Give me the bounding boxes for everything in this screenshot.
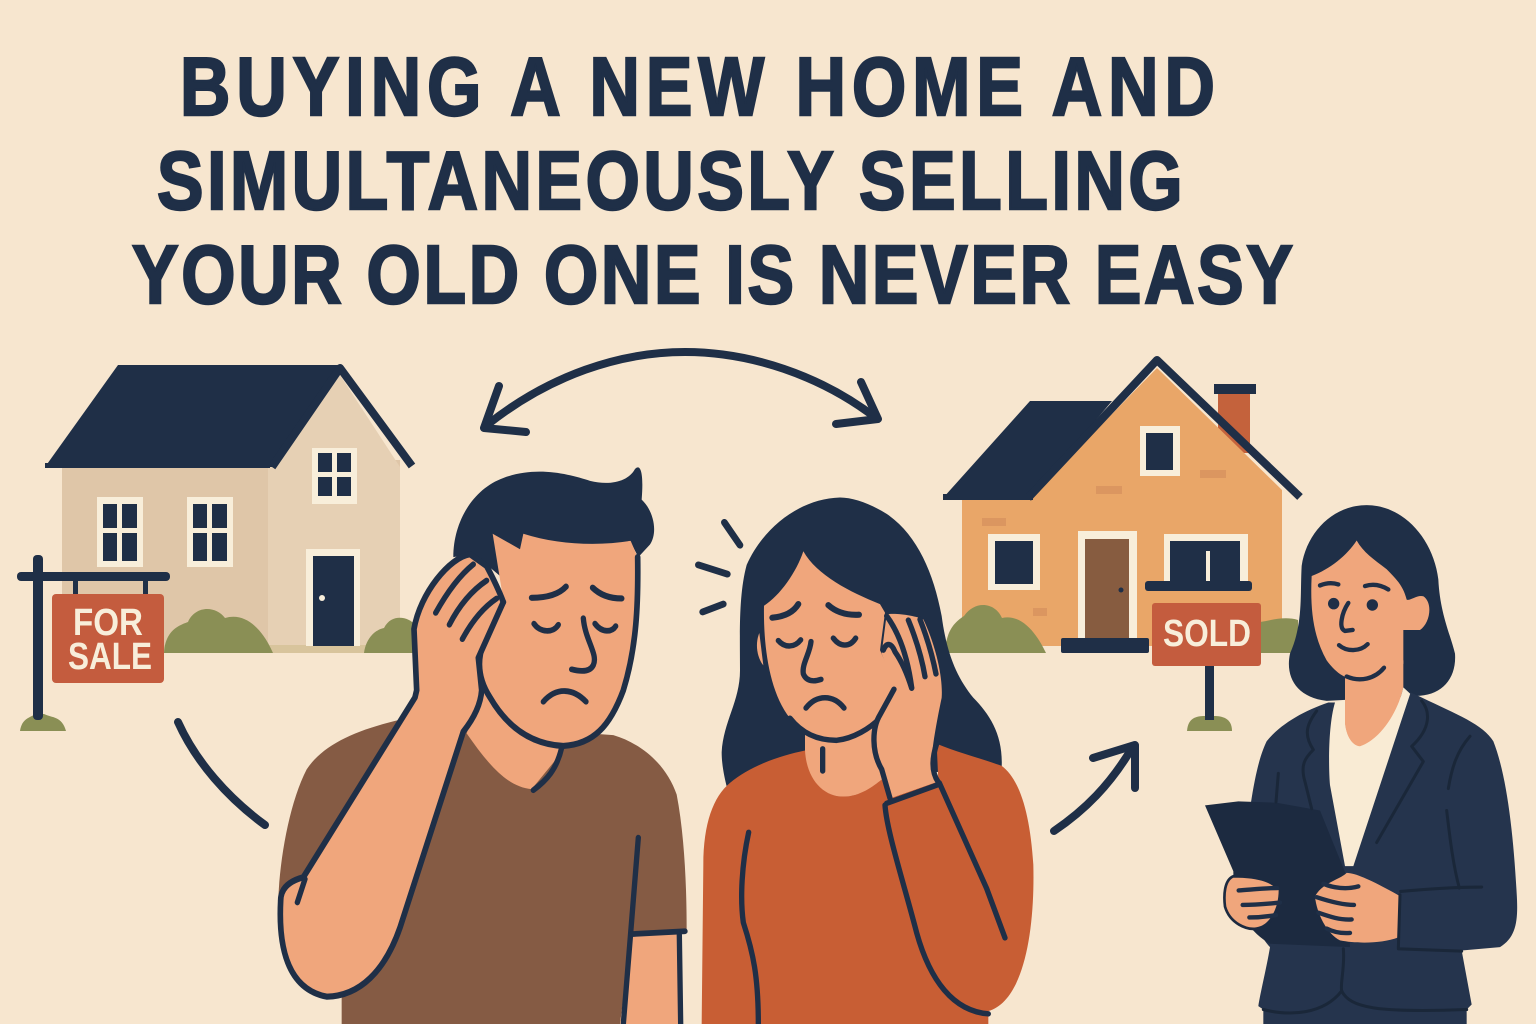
woman face [764, 551, 897, 740]
agent blazer [1241, 692, 1517, 1024]
agent lines [1239, 583, 1388, 933]
agent neck [1345, 660, 1403, 746]
icon: sold sign [1152, 603, 1261, 731]
icon: for sale sign: FOR [73, 602, 143, 644]
agent blouse [1329, 687, 1411, 866]
man raised arm and hand [280, 554, 503, 997]
man neck [467, 683, 565, 789]
woman neck [805, 722, 887, 797]
icon: for sale sign [17, 555, 170, 731]
man shirt [278, 720, 687, 1024]
agent hair [1289, 505, 1455, 701]
woman lines [698, 522, 1005, 1024]
arrow: right diagonal [1054, 745, 1135, 831]
woman hand [875, 614, 942, 798]
figure: real estate agent [1205, 505, 1517, 1024]
title: SIMULTANEOUSLY SELLING [157, 135, 1183, 227]
arrow: top double-headed curve [484, 352, 878, 432]
man finger lines [297, 564, 685, 1024]
man right arm [620, 933, 682, 1024]
man brows, eyes, nose, mouth [532, 587, 566, 598]
icon: orange sold house [943, 360, 1300, 653]
icon: beige house for sale [45, 365, 414, 653]
stress marks [724, 522, 740, 545]
woman hair [722, 497, 1002, 786]
agent clipboard [1205, 801, 1350, 947]
agent blazer seams [1263, 701, 1482, 1013]
figure: stressed woman [698, 497, 1033, 1024]
woman ear [757, 633, 763, 665]
title [132, 41, 1293, 321]
icon: for sale sign: SALE [68, 636, 152, 678]
title: YOUR OLD ONE IS NEVER EASY [132, 229, 1293, 321]
man hair [453, 467, 654, 579]
arrow: left curve [178, 722, 265, 825]
man face [481, 534, 638, 746]
woman brows, eyes, nose, mouth [772, 604, 798, 618]
agent hands [1224, 876, 1280, 929]
icon: sold sign: SOLD [1163, 613, 1251, 655]
agent face [1311, 541, 1429, 681]
woman shirt [702, 744, 1033, 1024]
figure: stressed man [278, 467, 687, 1024]
title: BUYING A NEW HOME AND [180, 41, 1215, 133]
